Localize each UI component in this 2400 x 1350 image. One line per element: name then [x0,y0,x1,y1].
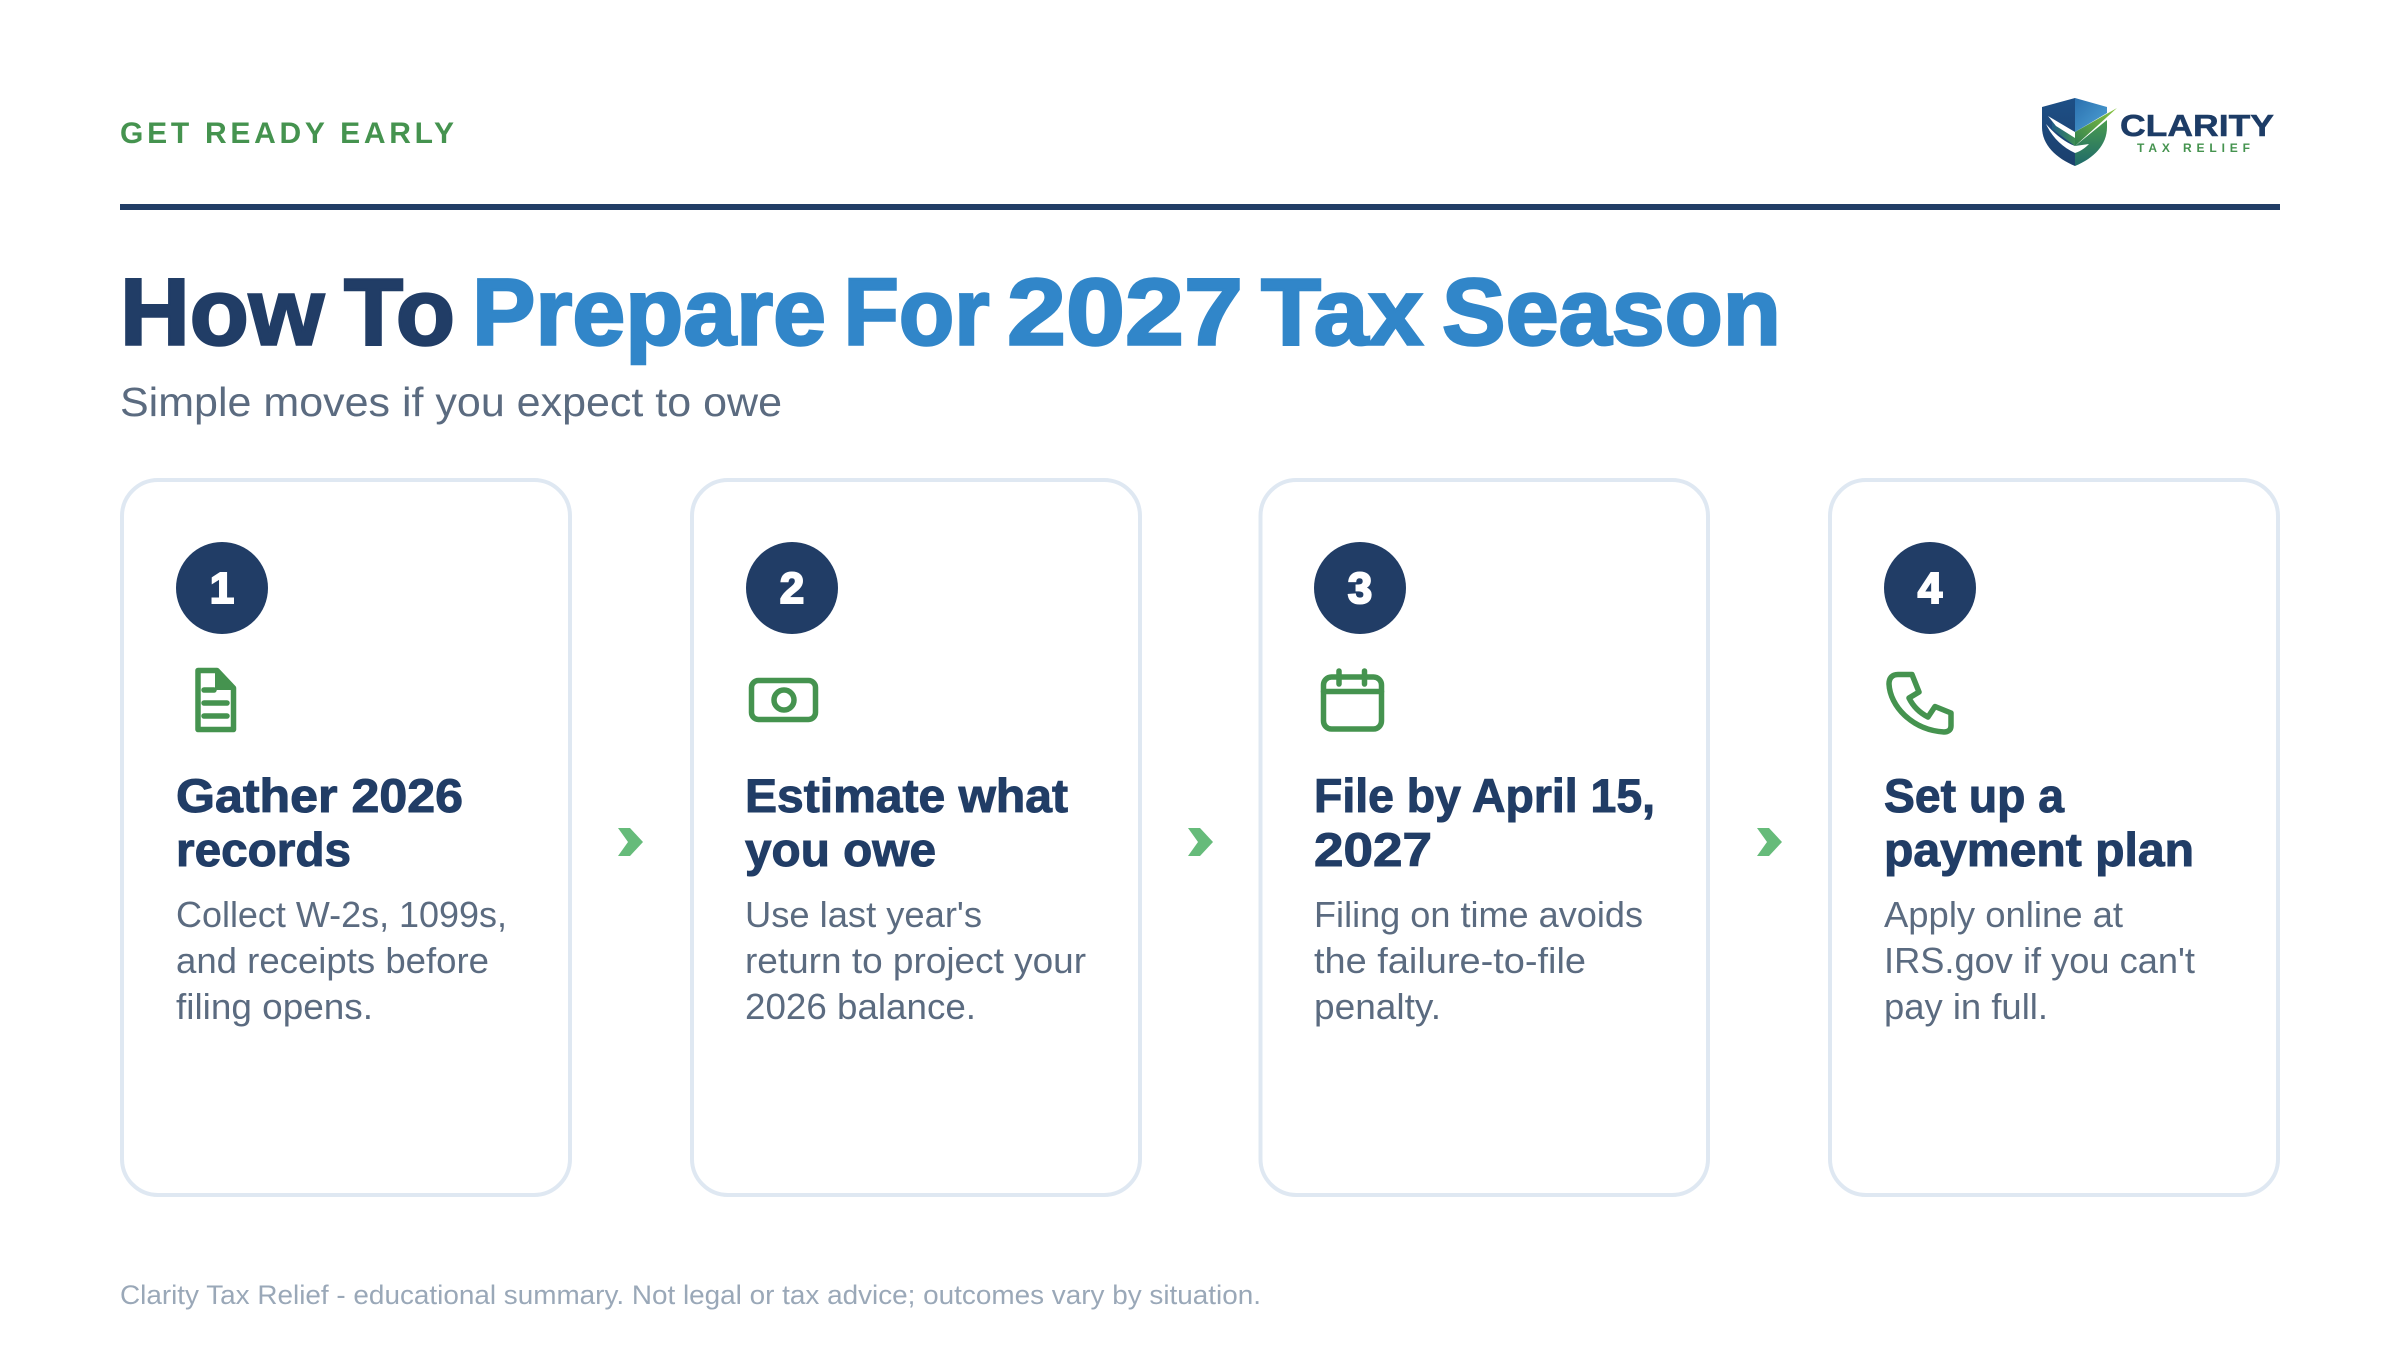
title: Tax [1261,260,1423,366]
footer disclaimer: Clarity Tax Relief - educational summary. Not legal or tax advice; outcomes vary by situation. [120,1280,1261,1310]
heading: records [176,823,351,876]
body text: Collect W-2s, 1099s, [176,894,507,935]
icon: shield with check [2042,98,2117,166]
body text: return to project your [745,940,1086,981]
title: For [844,260,990,366]
title: How [120,260,325,366]
panel: step 3 [1260,480,1708,1195]
logo tagline: TAX RELIEF [2137,141,2250,155]
body text: filing opens. [176,986,373,1027]
body text: Use last year's [745,894,982,935]
icon: telephone [1889,674,1951,732]
icon: document [198,670,234,730]
number badge 2: 2 [780,564,804,613]
heading: 2027 [1314,823,1432,876]
title: 2027 [1007,260,1243,366]
heading: Gather 2026 [176,769,463,822]
number badge 2 [746,542,838,634]
heading: payment plan [1884,823,2194,876]
arrow 2 [1188,828,1213,856]
icon: calendar [1324,671,1382,729]
body text: 2026 balance. [745,986,976,1027]
heading: Estimate what [745,769,1068,822]
body text [745,894,1086,1027]
panel: step 1 [122,480,570,1195]
body text [176,894,507,1027]
body text: Filing on time avoids [1314,894,1643,935]
body text [1884,894,2195,1027]
icon: banknote [752,680,816,720]
number badge 4 [1884,542,1976,634]
heading [1884,769,2194,876]
body text: and receipts before [176,940,489,981]
number badge 3: 3 [1348,564,1372,613]
panel: step 2 [692,480,1140,1195]
title [120,260,1781,366]
heading [745,769,1068,876]
card outline [692,480,1140,1195]
body text [1314,894,1643,1027]
heading [1314,769,1655,876]
header rule [120,204,2280,210]
body text: the failure-to-file [1314,940,1586,981]
body text: Apply online at [1884,894,2123,935]
heading: File by April 15, [1314,769,1655,822]
heading: Set up a [1884,769,2065,822]
title: To [344,260,455,366]
heading [176,769,463,876]
title: Prepare [472,260,826,366]
number badge 4: 4 [1918,564,1943,613]
number badge 1 [176,542,268,634]
title: Season [1442,260,1781,366]
heading: you owe [745,823,936,876]
eyebrow label: GET READY EARLY [120,117,454,150]
body text: penalty. [1314,986,1441,1027]
arrow 1 [618,828,643,856]
subtitle: Simple moves if you expect to owe [120,379,782,425]
card outline [1260,480,1708,1195]
number badge 3 [1314,542,1406,634]
logo: Clarity Tax Relief [2042,98,2274,166]
body text: IRS.gov if you can't [1884,940,2195,981]
arrow 3 [1757,828,1782,856]
body text: pay in full. [1884,986,2048,1027]
number badge 1: 1 [210,564,234,613]
card outline [1830,480,2278,1195]
logo wordmark: CLARITY [2120,108,2274,143]
card outline [122,480,570,1195]
panel: step 4 [1830,480,2278,1195]
